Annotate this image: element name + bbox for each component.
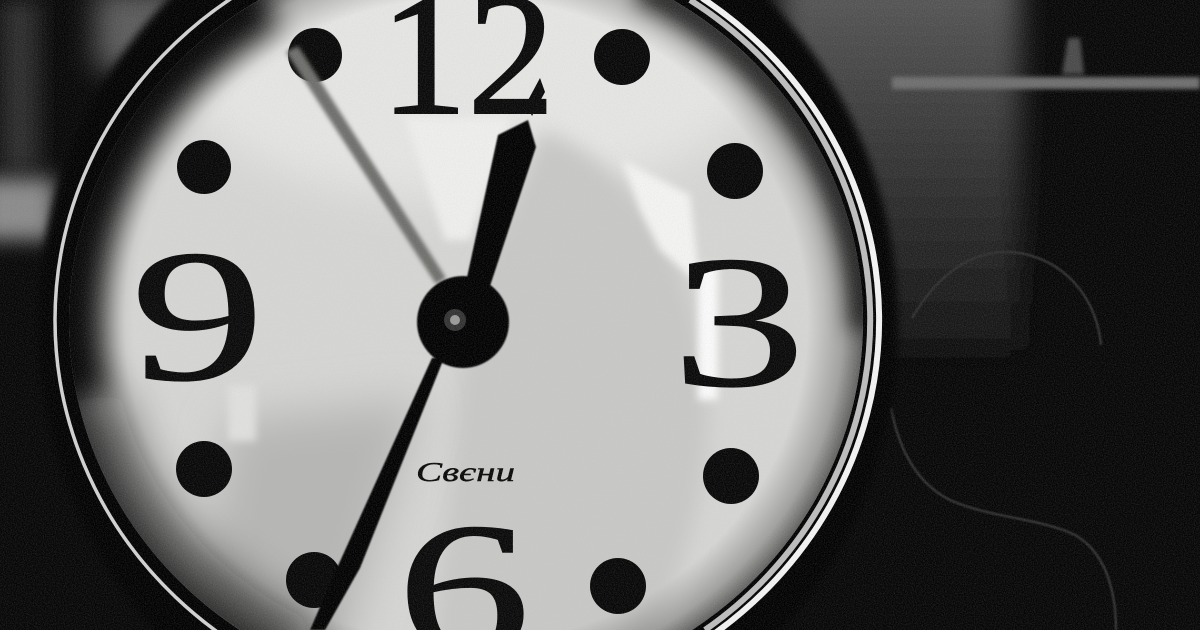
bright triangle between hands [414,123,502,242]
clock face [60,0,880,630]
lower left shading [80,400,300,630]
second hand [286,46,446,284]
lower left shade [190,400,420,630]
minute hand [310,358,444,630]
hour hand [466,120,536,286]
hour dots [176,28,763,614]
chrome ring [55,0,879,630]
window reflection on glass [228,160,718,441]
brand mark: Свєнu [416,457,515,487]
centre hub [417,276,509,368]
numeral 3: 3 [672,217,805,426]
grey dome reflection [430,130,708,630]
numeral 9: 9 [131,211,264,420]
upper left dark crescent [67,0,262,400]
wire stand [891,252,1116,630]
numeral 2 flourish [526,78,545,116]
upper right shading [640,0,862,330]
edge vignette [69,0,863,630]
clock case [38,0,898,630]
shelf [892,38,1200,89]
bright upper dial [180,0,760,200]
